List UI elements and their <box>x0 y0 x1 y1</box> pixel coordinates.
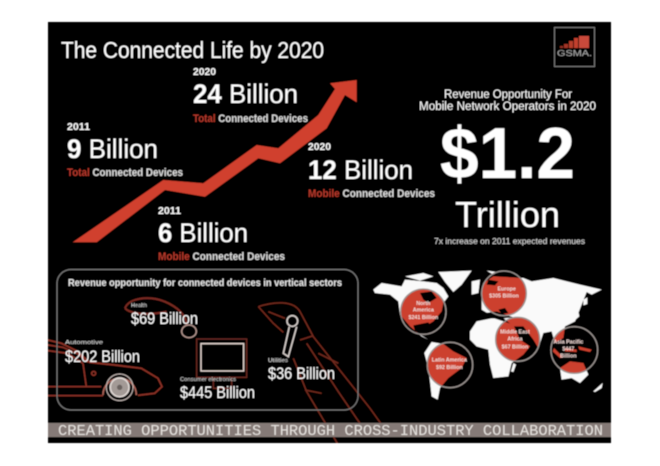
revenue opportunity headline: Revenue Opportunity For <box>444 89 572 101</box>
region labels: North <box>416 301 430 307</box>
region labels <box>409 287 583 371</box>
stat: 2011 mobile connected devices: Mobile Connected Devices <box>158 251 285 263</box>
region: Europe <box>482 271 526 316</box>
region labels: $92 Billion <box>436 365 463 371</box>
stat: 2011 total connected devices: 2011 <box>67 122 90 133</box>
stat: 2020 mobile connected devices: 2020 <box>308 142 331 153</box>
sectors heading: Revenue opportunity for connected devices in vertical sectors <box>68 277 342 289</box>
stat: 2020 total connected devices: 2020 <box>193 67 216 78</box>
sector: utilities <box>268 358 335 383</box>
region: North America <box>401 289 446 334</box>
sector: consumer electronics: Consumer electronics <box>180 377 236 383</box>
region labels: Billion <box>560 353 576 359</box>
sector: utilities: $36 Billion <box>268 364 335 383</box>
sector: health: Health <box>131 303 147 309</box>
big number: $1.2 Trillion: 7x increase on 2011 expected revenues <box>434 236 585 246</box>
sector: automotive: $202 Billion <box>65 347 140 366</box>
region: Asia Pacific <box>551 327 598 373</box>
sector: consumer electronics <box>180 377 255 402</box>
stat: 2020 mobile connected devices: 12 Billion <box>308 155 413 185</box>
region labels: Middle East <box>500 330 530 336</box>
region labels: Asia Pacific <box>553 339 583 345</box>
sector: automotive <box>65 340 140 366</box>
region labels: $67 Billion <box>502 344 528 350</box>
stat: 2020 total connected devices <box>193 67 308 125</box>
logo: GSMA: GSMA. <box>557 49 592 58</box>
Americas landmasses <box>373 271 472 400</box>
region labels: $447 <box>562 346 574 352</box>
region labels: Latin America <box>432 358 467 364</box>
region labels: Europe <box>497 287 516 293</box>
arrow: growth trend <box>73 80 357 242</box>
stat: 2020 total connected devices: Total Connected Devices <box>193 113 308 125</box>
stat: 2011 total connected devices <box>67 122 183 179</box>
revenue opportunity headline <box>419 89 596 113</box>
region circles <box>401 271 598 388</box>
region labels: America <box>413 308 434 314</box>
world map <box>373 271 603 400</box>
sector: automotive: Automotive <box>65 340 103 346</box>
stat: 2020 mobile connected devices <box>308 142 435 200</box>
region labels: $305 Billion <box>489 294 519 300</box>
circle outlines <box>401 271 598 388</box>
tagline strip: CREATING OPPORTUNITIES THROUGH CROSS-INDUSTRY COLLABORATION <box>58 423 603 440</box>
sector: health <box>131 303 198 328</box>
stat: 2020 total connected devices: 24 Billion <box>193 79 298 109</box>
sector: health: $69 Billion <box>131 309 198 328</box>
big number: $1.2 Trillion: Trillion <box>455 194 560 235</box>
icon: wrench <box>258 303 387 445</box>
stat: 2011 total connected devices: Total Connected Devices <box>67 167 183 179</box>
stat: 2011 mobile connected devices: 6 Billion <box>158 218 248 248</box>
logo: GSMA <box>554 28 594 66</box>
vertical sectors line art <box>48 298 387 445</box>
panel: black background <box>48 22 611 443</box>
stat: 2011 mobile connected devices <box>158 206 285 263</box>
stat: 2020 mobile connected devices: Mobile Connected Devices <box>308 188 435 200</box>
Eurasia, Africa and Oceania landmasses <box>470 271 603 392</box>
icon: stethoscope <box>125 298 196 338</box>
big number: $1.2 Trillion: $1.2 <box>440 114 575 194</box>
region labels: $241 Billion <box>409 315 438 321</box>
sector: consumer electronics: $445 Billion <box>180 383 255 402</box>
big number: $1.2 Trillion <box>434 114 585 246</box>
icon: monitor <box>197 339 247 388</box>
region: Latin America <box>427 342 473 388</box>
region: Middle East and Africa <box>496 317 540 361</box>
revenue opportunity headline: Mobile Network Operators in 2020 <box>419 101 596 113</box>
stat: 2011 mobile connected devices: 2011 <box>158 206 181 217</box>
region labels: Africa <box>507 337 523 343</box>
icon: car <box>48 340 162 401</box>
title: The Connected Life by 2020 <box>61 37 324 63</box>
sector: utilities: Utilities <box>268 358 288 364</box>
stat: 2011 total connected devices: 9 Billion <box>67 134 158 164</box>
panel: vertical sectors <box>57 270 358 410</box>
